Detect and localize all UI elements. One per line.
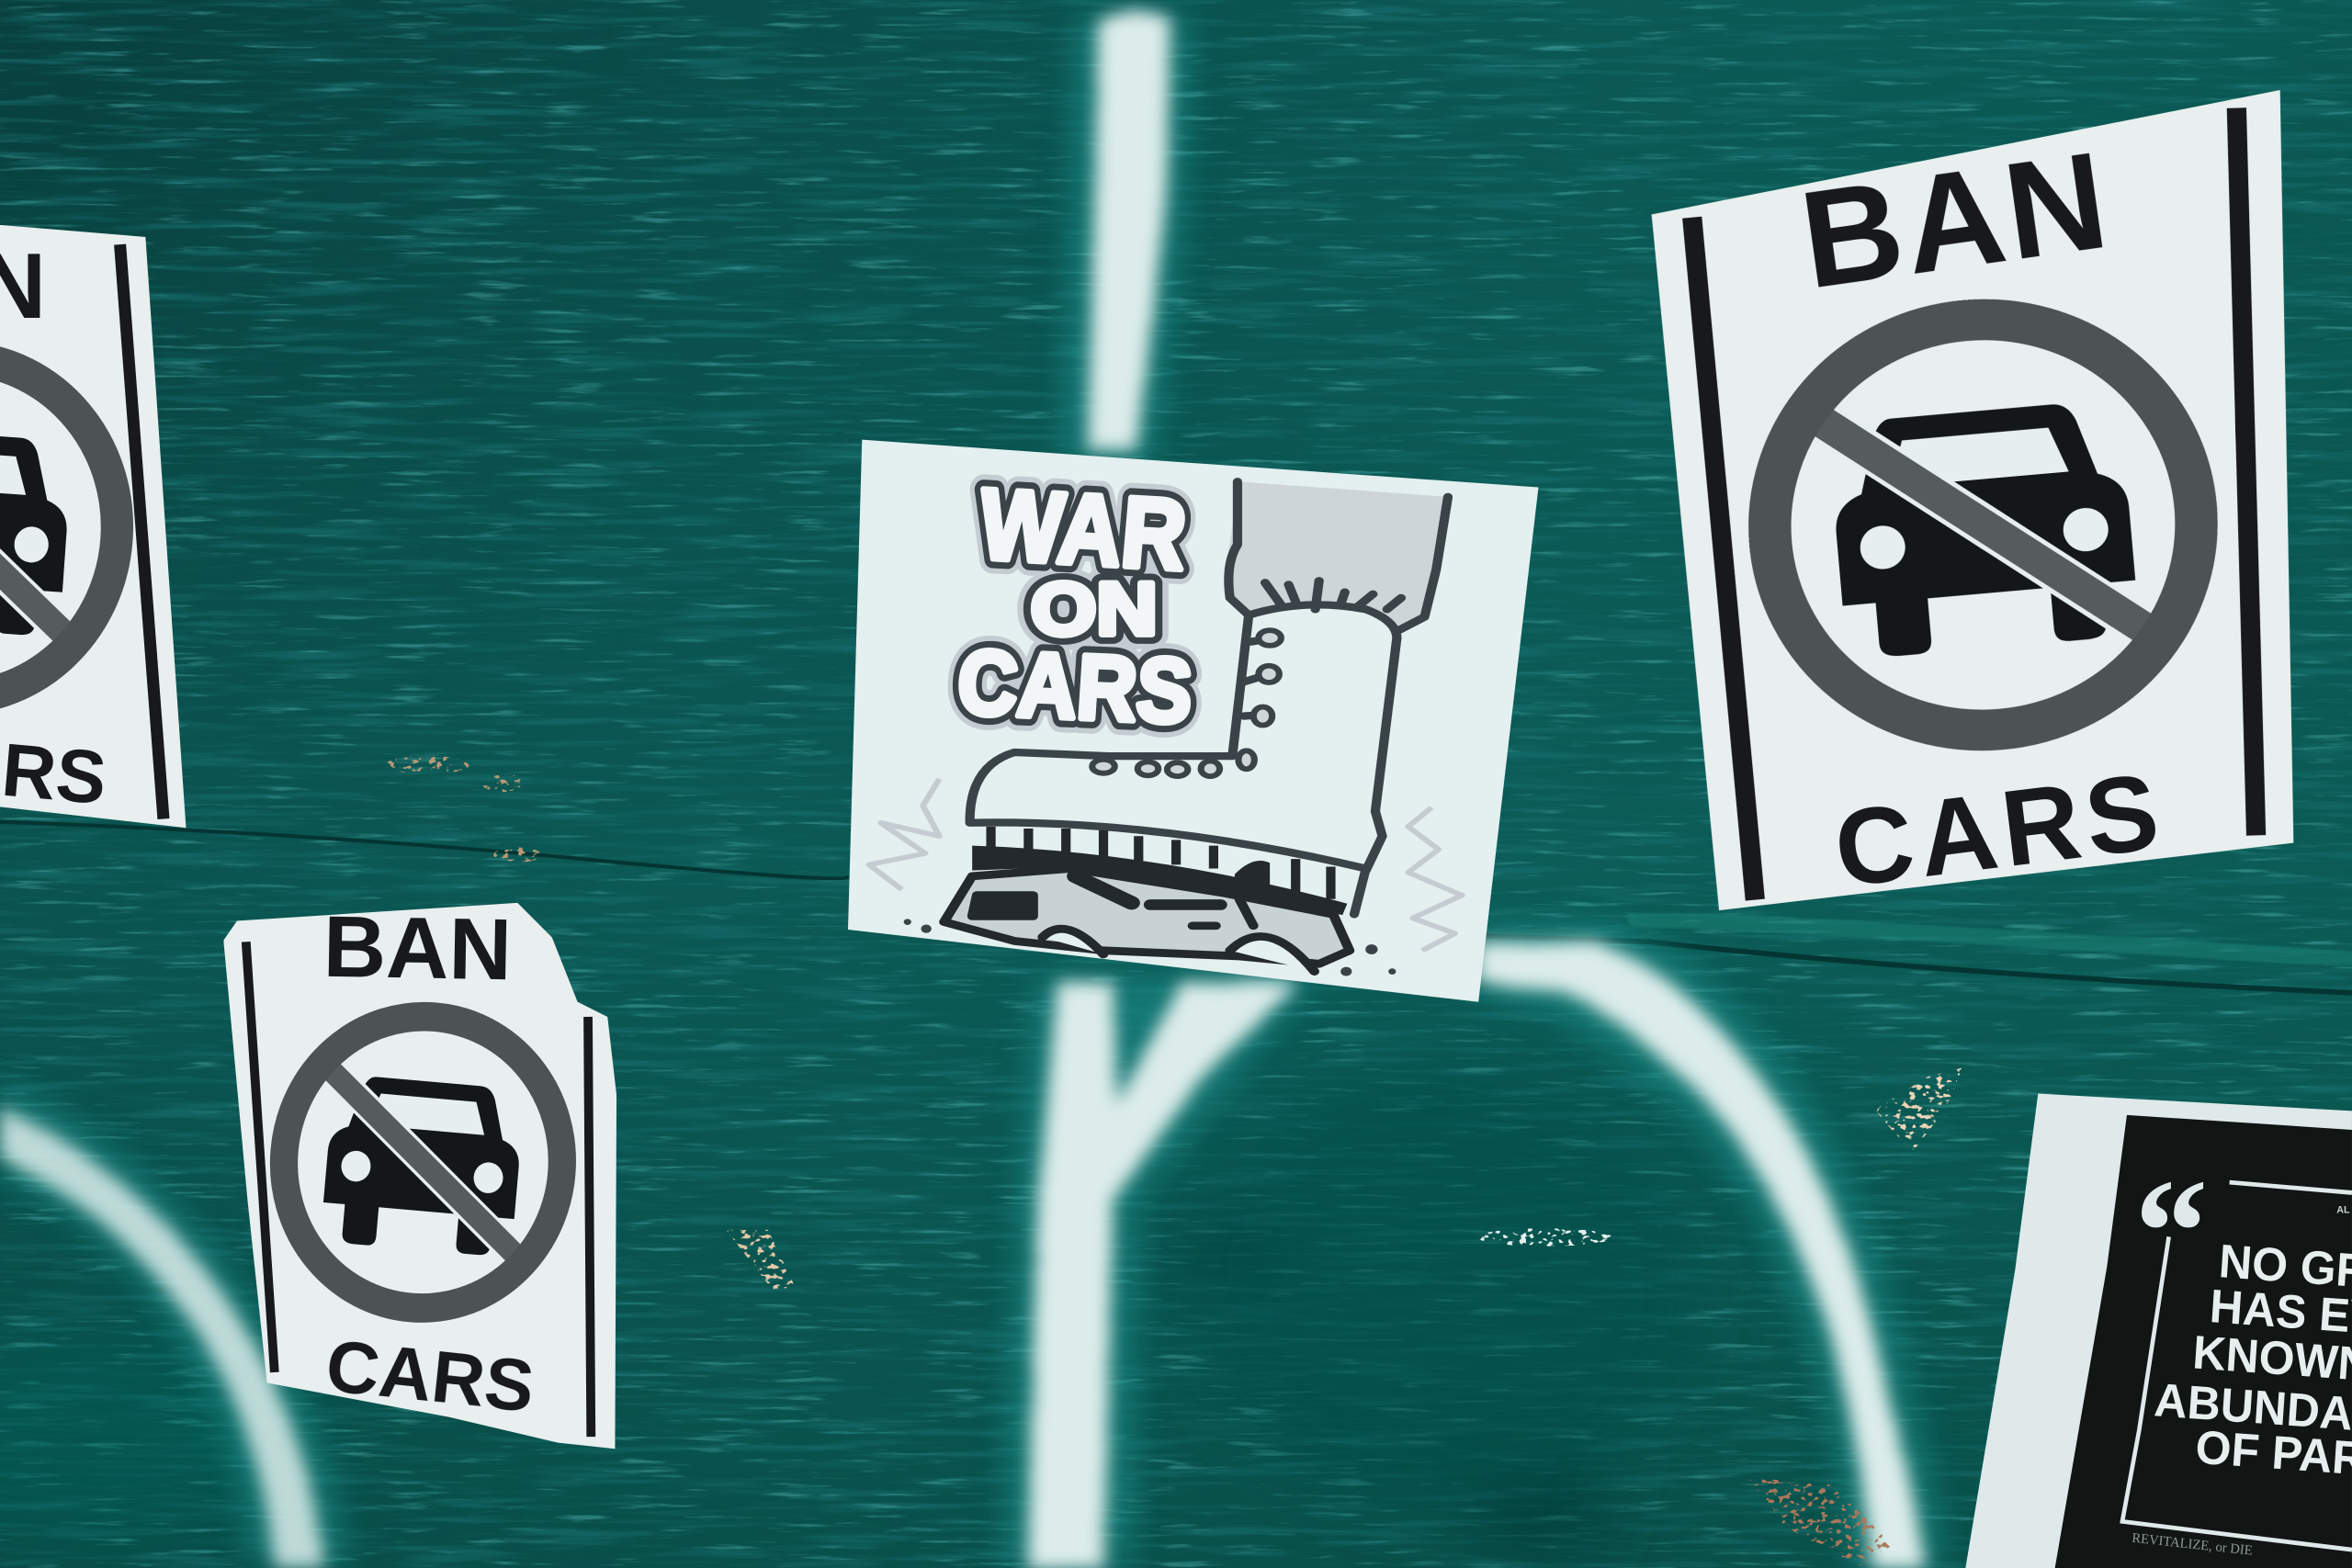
poster: war on cars sticker <box>848 440 1538 1002</box>
icon: no cars sign <box>1753 302 2213 748</box>
poster border stripes <box>246 942 591 1437</box>
lettering outline: CARS <box>955 630 1195 742</box>
poster label: CARS: CARS <box>322 1324 538 1427</box>
quote rules <box>2122 1182 2352 1550</box>
lettering face: CARS <box>955 630 1195 742</box>
lettering outline: ON <box>1031 568 1158 650</box>
debris dots <box>904 919 1396 976</box>
poster: ban cars, top right <box>1652 90 2293 910</box>
poster: ban cars, far left <box>0 225 186 828</box>
boot outline <box>970 481 1448 914</box>
quote body text <box>2150 1230 2352 1485</box>
boot sole <box>972 827 1347 915</box>
poster border stripes <box>1692 108 2256 900</box>
poster heading: BAN: BAN <box>1792 122 2119 318</box>
lettering face <box>955 468 1195 742</box>
wall cracks <box>0 822 2352 993</box>
lettering outline <box>955 468 1195 742</box>
icon: no cars sign <box>0 347 129 709</box>
poster: ban cars, bottom left <box>223 898 616 1449</box>
wall knots and dark patches <box>0 1065 1695 1553</box>
quote mark: “ <box>2134 1148 2208 1316</box>
poster: quote, bottom right <box>1965 1094 2352 1568</box>
sticker lettering: WAR ON CARS <box>955 468 1195 742</box>
boot lace eyelets <box>1092 630 1281 776</box>
poster heading: BAN: BAN <box>322 898 513 998</box>
crushed car <box>944 869 1350 972</box>
lettering face: ON <box>1031 568 1158 650</box>
lettering halo: WAR <box>976 468 1191 591</box>
lettering face: WAR <box>976 468 1191 591</box>
sock cuff <box>1227 481 1448 628</box>
poster label fragment: RS <box>0 728 109 820</box>
impact lines <box>869 779 1462 951</box>
lettering halo <box>955 468 1195 742</box>
poster label: CARS: CARS <box>1828 750 2171 909</box>
quote footer text: REVITALIZE, or DIE <box>2132 1531 2253 1559</box>
lettering outline: WAR <box>976 468 1191 591</box>
icon: no cars sign <box>272 1005 574 1320</box>
quote line 4: ABUNDA <box>2153 1373 2352 1440</box>
lettering halo: ON <box>1031 568 1158 650</box>
lettering halo: CARS <box>955 630 1195 742</box>
quote small credit: AL <box>2336 1205 2350 1216</box>
paint damage marks <box>386 756 1962 1566</box>
poster border stripe <box>120 244 164 818</box>
quote black panel <box>2055 1115 2352 1568</box>
